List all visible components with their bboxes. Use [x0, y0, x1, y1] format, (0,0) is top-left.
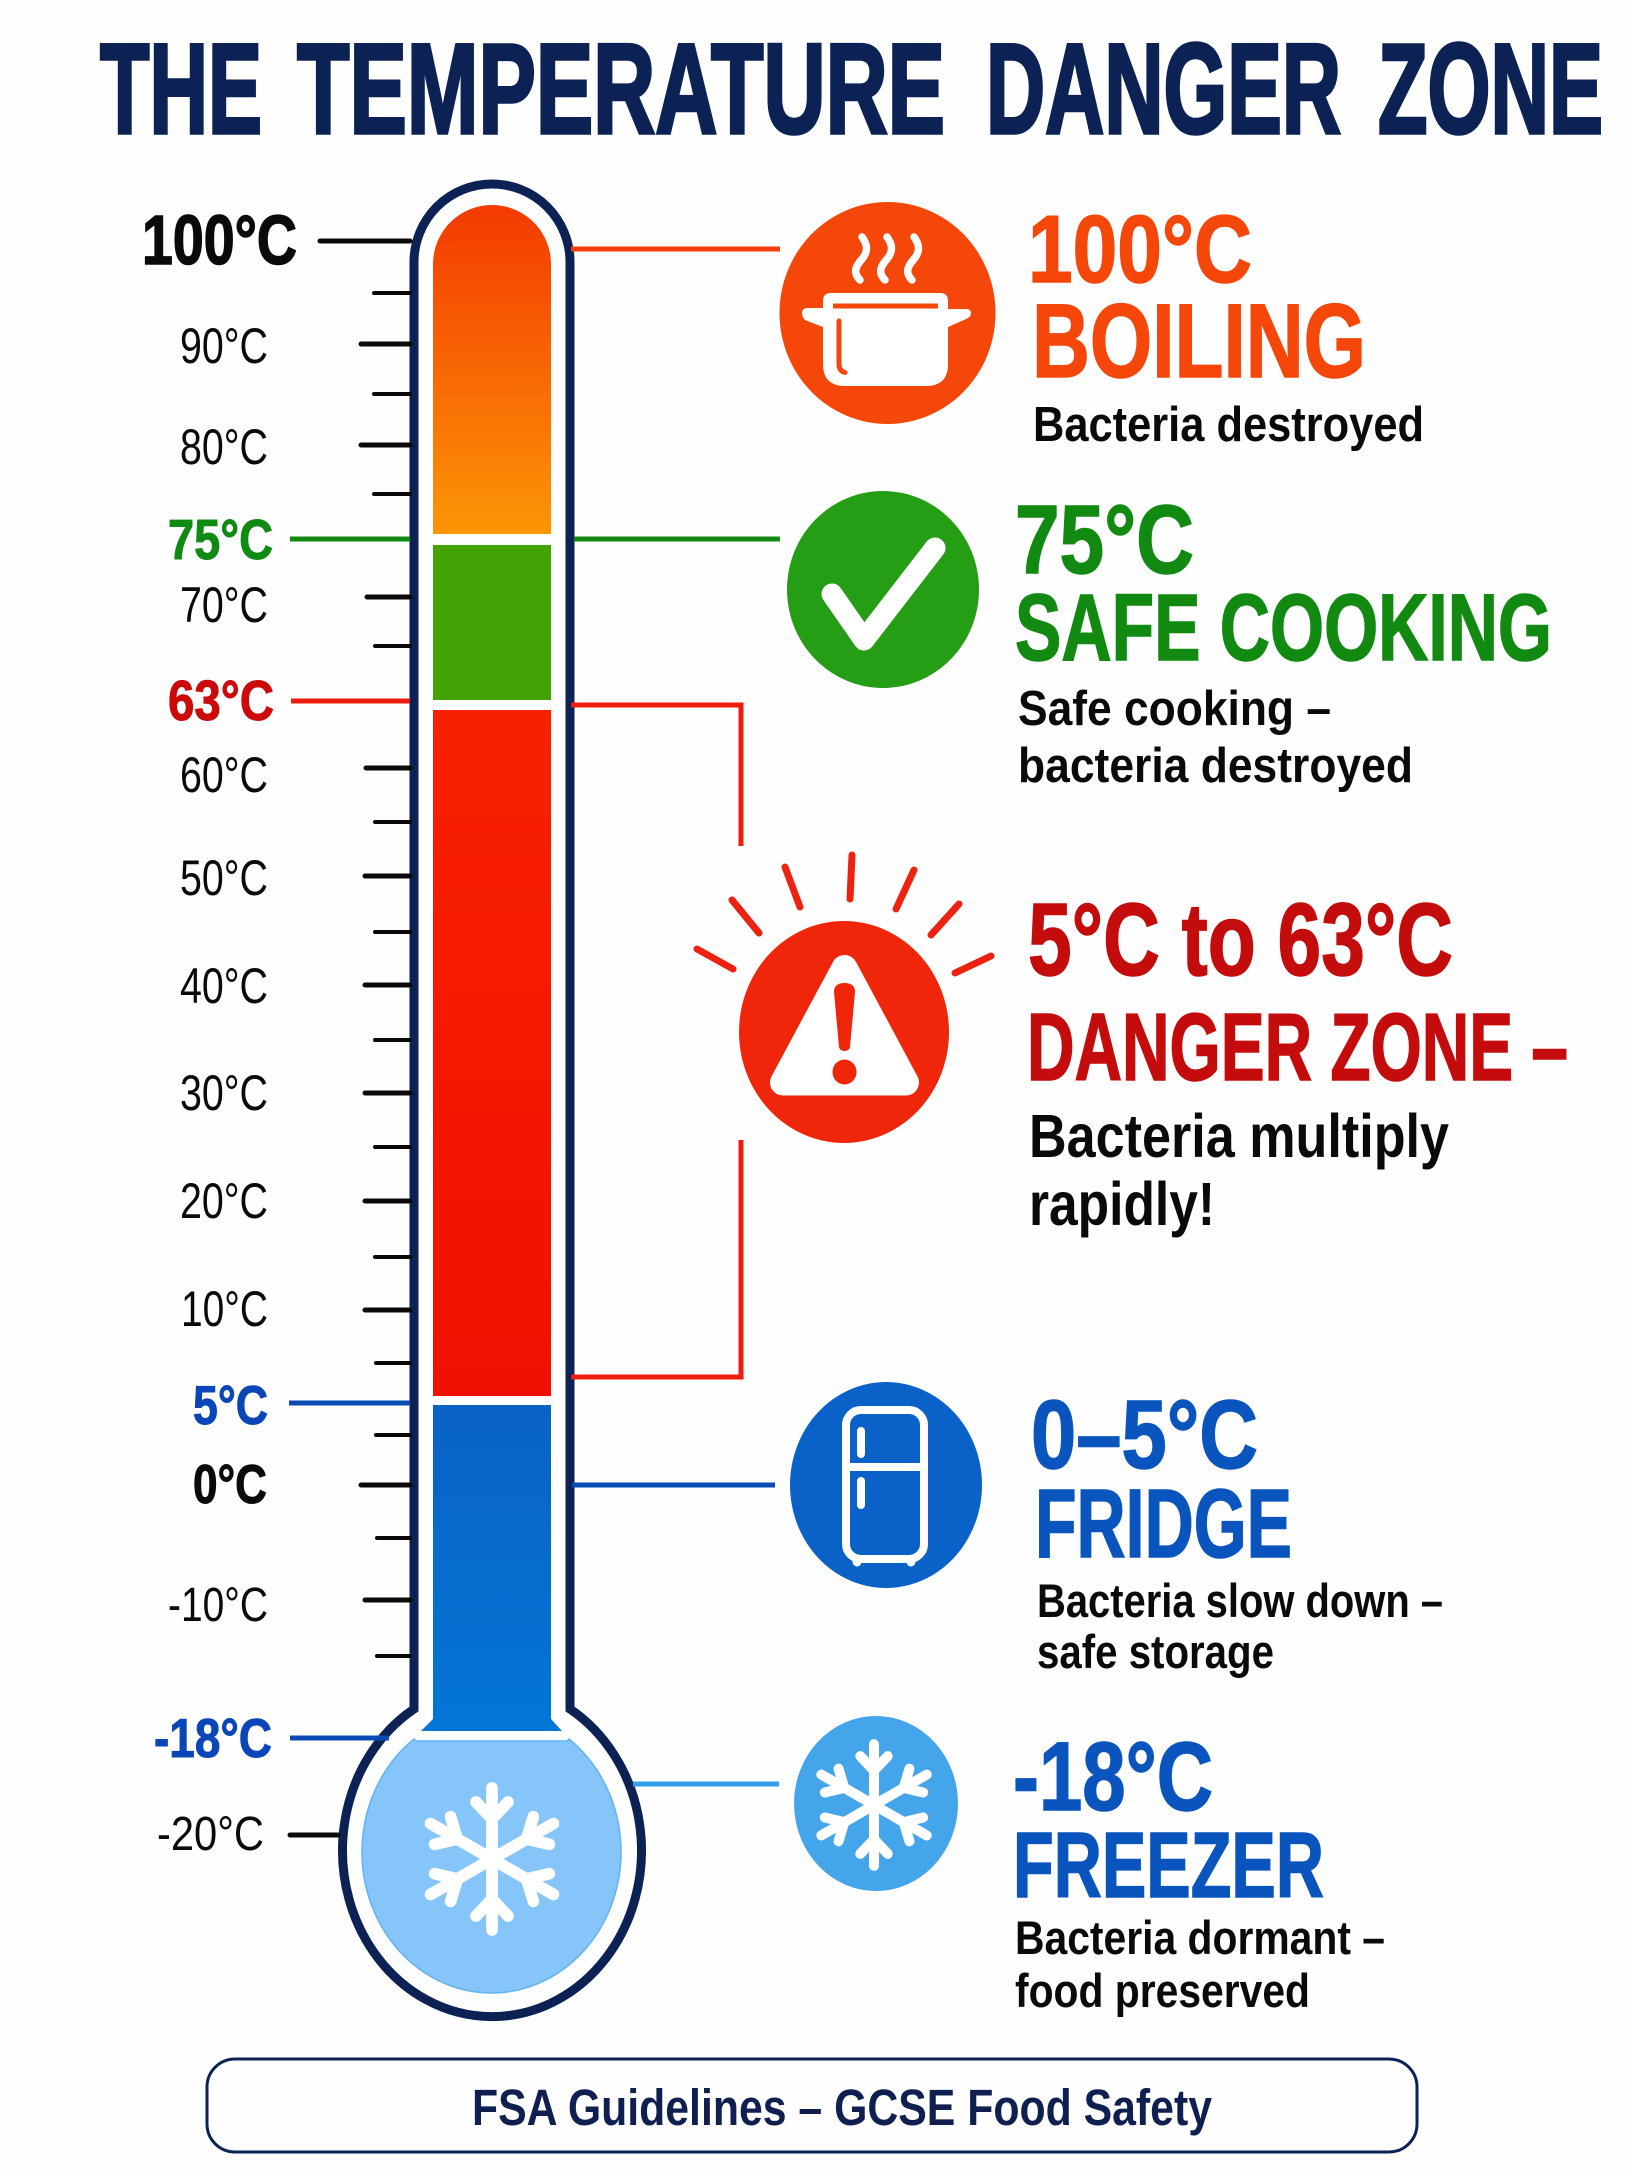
label 70C: 70°C — [180, 577, 268, 633]
fill: boiling section — [433, 205, 551, 534]
description: safe cooking — [1018, 682, 1413, 793]
icon: bulb snowflake — [423, 1788, 561, 1930]
heading: freezer: FREEZER — [1013, 1813, 1324, 1917]
panel: fridge — [790, 1380, 1443, 1678]
label 0C: 0°C — [193, 1453, 267, 1515]
heading: boiling: BOILING — [1032, 283, 1366, 400]
icon: freezer snowflake — [794, 1716, 958, 1891]
description: freezer — [1015, 1911, 1385, 2017]
label 5C: 5°C — [193, 1374, 268, 1436]
heading: 75C: 75°C — [1015, 485, 1194, 594]
label 50C: 50°C — [180, 850, 268, 906]
description: fridge: safe storage — [1037, 1625, 1274, 1678]
label 30C: 30°C — [180, 1065, 268, 1121]
heading: 0-5C: 0–5°C — [1031, 1380, 1258, 1489]
label -18C: -18°C — [154, 1707, 272, 1769]
connector: boiling — [571, 246, 780, 252]
title: THE — [100, 18, 262, 161]
label 75C: 75°C — [168, 508, 273, 572]
fill: danger section — [433, 710, 551, 1396]
heading: 100C: 100°C — [1028, 196, 1252, 303]
thermometer — [342, 184, 642, 2017]
connector: safe cooking — [290, 536, 780, 542]
description: boiling: Bacteria destroyed — [1033, 398, 1424, 452]
panel: danger zone — [697, 855, 1568, 1238]
description: danger zone — [1029, 1102, 1449, 1238]
panel: boiling — [780, 196, 1424, 452]
scale tick marks — [290, 241, 410, 1835]
title — [100, 18, 1603, 161]
fill: fridge section — [421, 1405, 562, 1731]
icon: check mark — [787, 491, 979, 688]
label 80C: 80°C — [180, 419, 268, 475]
description: safe cooking: bacteria destroyed — [1018, 739, 1413, 793]
label 60C: 60°C — [180, 747, 268, 803]
connector: minus 18 — [290, 1736, 389, 1740]
label -10C: -10°C — [168, 1579, 268, 1632]
heading: -18C: -18°C — [1013, 1722, 1213, 1831]
label 63C: 63°C — [168, 669, 274, 733]
panel: freezer — [794, 1716, 1385, 2017]
description: safe cooking: Safe cooking – — [1018, 682, 1331, 736]
description: fridge — [1037, 1574, 1443, 1678]
heading: fridge: FRIDGE — [1035, 1469, 1292, 1578]
connector lines — [289, 249, 780, 1784]
connector: fridge — [289, 1403, 775, 1485]
thermometer outline and bulb — [342, 184, 642, 2017]
label 10C: 10°C — [181, 1281, 268, 1337]
description: danger zone: Bacteria multiply — [1029, 1102, 1449, 1170]
label 20C: 20°C — [180, 1173, 268, 1229]
label 40C: 40°C — [180, 958, 268, 1014]
icon: fridge — [790, 1382, 982, 1588]
description: danger zone: rapidly! — [1029, 1170, 1215, 1238]
panel: safe cooking — [787, 485, 1552, 793]
description: fridge: Bacteria slow down – — [1037, 1574, 1443, 1627]
title: DANGER — [986, 18, 1341, 161]
scale labels — [142, 201, 297, 1861]
icon: boiling pot — [780, 202, 996, 424]
footer box — [207, 2059, 1417, 2152]
title: TEMPERATURE — [297, 18, 945, 161]
connector: freezer — [633, 1782, 779, 1786]
label 100C: 100°C — [142, 201, 297, 279]
connector: danger zone — [291, 701, 741, 1377]
footer — [207, 2059, 1417, 2152]
description: freezer: food preserved — [1015, 1964, 1310, 2017]
footer text: FSA Guidelines – GCSE Food Safety — [472, 2079, 1213, 2136]
fill: freezer bulb — [362, 1739, 621, 1993]
label -20C: -20°C — [157, 1808, 264, 1861]
heading: 5C to 63C: 5°C to 63°C — [1028, 882, 1453, 997]
description: freezer: Bacteria dormant – — [1015, 1911, 1385, 1964]
fill: safe cooking section — [433, 545, 551, 700]
label 90C: 90°C — [180, 318, 268, 374]
icon: warning triangle — [697, 855, 991, 1143]
